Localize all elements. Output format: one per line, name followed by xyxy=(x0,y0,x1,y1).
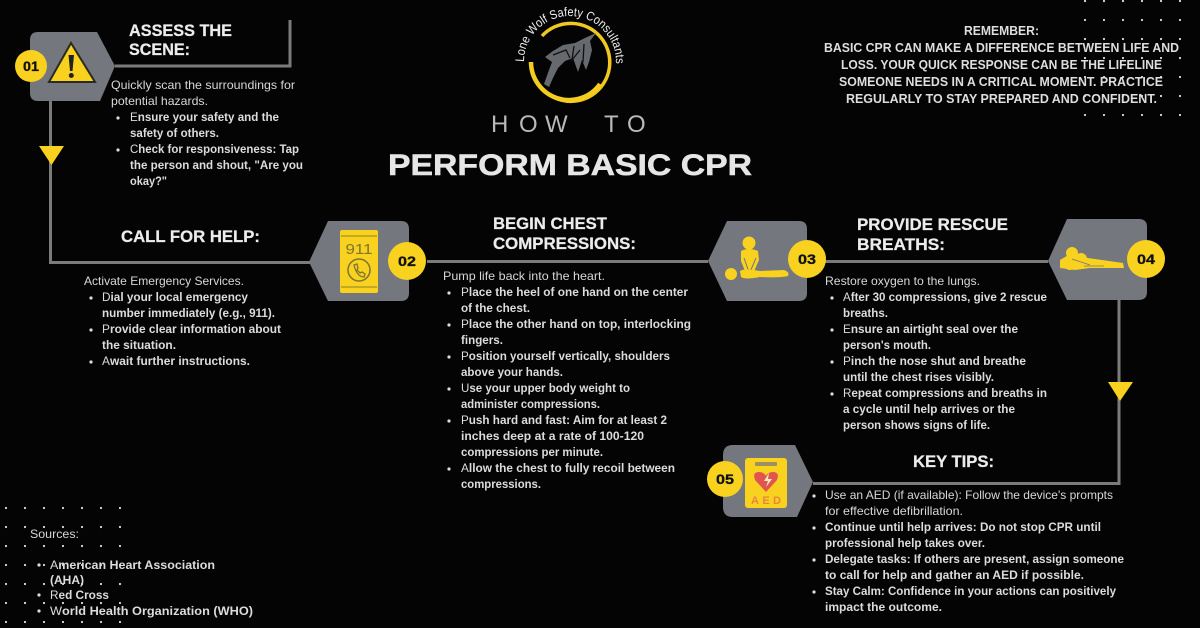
heading: assess the scene xyxy=(129,22,232,59)
text: chest compression steps: of the chest. xyxy=(461,301,530,315)
text: assess the scene steps: okay?" xyxy=(130,174,167,188)
arrow: step 4 to step 5 xyxy=(1108,382,1133,401)
step 1 badge: warning icon xyxy=(15,32,115,101)
text: key tips list: Continue until help arrives: Do not stop CPR until xyxy=(825,520,1101,534)
heading: provide rescue breaths xyxy=(857,216,1008,254)
text: chest compression steps: Allow the chest to fully recoil between xyxy=(461,461,675,475)
text: rescue breath steps: until the chest rises visibly. xyxy=(843,370,994,384)
text: chest compression steps: compressions per minute. xyxy=(461,445,603,459)
text: key tips list: Use an AED (if available): Follow the device's prompts xyxy=(825,488,1113,502)
text: assess the scene steps: safety of others. xyxy=(130,126,219,140)
callout: remember: SOMEONE NEEDS IN A CRITICAL MOMENT. PRACTICE xyxy=(839,75,1163,89)
text: chest compression steps: fingers. xyxy=(461,333,503,347)
text: assess the scene steps: potential hazards. xyxy=(111,94,208,108)
text: rescue breath steps xyxy=(825,274,1047,432)
step 5 badge: AED icon: 05 xyxy=(716,471,734,487)
text: key tips list: impact the outcome. xyxy=(825,600,942,614)
text: key tips list: Stay Calm: Confidence in your actions can positively xyxy=(825,584,1116,598)
text: sources: Red Cross xyxy=(50,588,109,602)
text: chest compression steps: Use your upper body weight to xyxy=(461,381,630,395)
text: sources: Sources: xyxy=(30,527,79,541)
text: chest compression steps: inches deep at a rate of 100-120 xyxy=(461,429,644,443)
text: key tips list: professional help takes over. xyxy=(825,536,985,550)
step 2 badge: 911 phone icon: 911 xyxy=(346,241,372,258)
step 4 badge: rescue breath icon: 04 xyxy=(1137,251,1155,267)
text: chest compression steps: Place the other hand on top, interlocking xyxy=(461,317,691,331)
text: chest compression steps: Place the heel of one hand on the center xyxy=(461,285,688,299)
text: rescue breath steps: Repeat compressions and breaths in xyxy=(843,386,1047,400)
text: chest compression steps: compressions. xyxy=(461,477,541,491)
text: assess the scene steps: Check for responsiveness: Tap xyxy=(130,142,299,156)
text: call for help steps: the situation. xyxy=(102,338,176,352)
step 3 badge: CPR icon: 03 xyxy=(798,251,816,267)
text: chest compression steps: Push hard and fast: Aim for at least 2 xyxy=(461,413,667,427)
text: key tips list: for effective defibrillation. xyxy=(825,504,963,518)
text: sources: World Health Organization (WHO) xyxy=(50,604,253,618)
callout: remember: LOSS. YOUR QUICK RESPONSE CAN BE THE LIFELINE xyxy=(841,58,1162,72)
arrow: step 1 to step 2 xyxy=(39,146,64,165)
heading: key tips: KEY TIPS: xyxy=(913,453,994,471)
logo: Lone Wolf Safety Consultants: Lone Wolf Safety Consultants xyxy=(515,7,624,64)
text: sources: (AHA) xyxy=(50,573,84,587)
text: rescue breath steps: a cycle until help arrives or the xyxy=(843,402,1015,416)
text: rescue breath steps: Restore oxygen to the lungs. xyxy=(825,274,980,288)
step 4 badge: rescue breath icon xyxy=(1048,219,1165,300)
heading: provide rescue breaths: PROVIDE RESCUE xyxy=(857,216,1008,234)
text: assess the scene steps: the person and shout, "Are you xyxy=(130,158,303,172)
text: rescue breath steps: Pinch the nose shut and breathe xyxy=(843,354,1026,368)
text: rescue breath steps: breaths. xyxy=(843,306,888,320)
text: rescue breath steps: After 30 compressions, give 2 rescue xyxy=(843,290,1047,304)
text: rescue breath steps: person's mouth. xyxy=(843,338,931,352)
heading: begin chest compressions: COMPRESSIONS: xyxy=(493,235,636,253)
text: call for help steps xyxy=(84,274,281,368)
heading: begin chest compressions: BEGIN CHEST xyxy=(493,215,607,233)
text: assess the scene steps: Ensure your safety and the xyxy=(130,110,279,124)
callout: remember xyxy=(824,24,1179,106)
text: rescue breath steps: Ensure an airtight seal over the xyxy=(843,322,1018,336)
text: key tips list: Delegate tasks: If others are present, assign someone xyxy=(825,552,1124,566)
heading: assess the scene: ASSESS THE xyxy=(129,22,232,40)
text: call for help steps: number immediately (e.g., 911). xyxy=(102,306,275,320)
text: chest compression steps: Position yourself vertically, shoulders xyxy=(461,349,670,363)
title: HOWTO xyxy=(491,111,646,138)
text: sources: American Heart Association xyxy=(50,558,215,572)
title xyxy=(388,111,752,182)
heading: call for help: CALL FOR HELP: xyxy=(121,228,260,246)
text: key tips list: to call for help and gather an AED if possible. xyxy=(825,568,1084,582)
text: chest compression steps: Pump life back into the heart. xyxy=(443,269,605,283)
callout: remember: REMEMBER: xyxy=(964,24,1039,38)
text: key tips list xyxy=(812,488,1124,614)
step 2 badge: 911 phone icon xyxy=(309,221,426,301)
heading: begin chest compressions xyxy=(493,215,636,253)
step 1 badge: warning icon: 01 xyxy=(23,58,39,74)
text: sources xyxy=(30,527,253,618)
heading: assess the scene: SCENE: xyxy=(129,41,190,59)
step 5 badge: AED icon xyxy=(707,445,813,517)
logo: Lone Wolf Safety Consultants xyxy=(515,7,624,104)
text: call for help steps: Dial your local emergency xyxy=(102,290,248,304)
text: call for help steps: Activate Emergency Services. xyxy=(84,274,244,288)
text: chest compression steps xyxy=(443,269,691,491)
text: chest compression steps: administer compressions. xyxy=(461,397,600,411)
step 3 badge: CPR icon xyxy=(708,221,826,301)
callout: remember: REGULARLY TO STAY PREPARED AND CONFIDENT. xyxy=(846,92,1157,106)
heading: provide rescue breaths: BREATHS: xyxy=(857,236,945,254)
step 5 badge: AED icon: AED xyxy=(751,495,781,507)
step 2 badge: 911 phone icon: 02 xyxy=(398,253,416,269)
text: assess the scene steps: Quickly scan the surroundings for xyxy=(111,78,295,92)
title: PERFORM BASIC CPR xyxy=(388,149,752,182)
text: rescue breath steps: person shows signs of life. xyxy=(843,418,990,432)
text: chest compression steps: above your hands. xyxy=(461,365,563,379)
text: call for help steps: Provide clear information about xyxy=(102,322,281,336)
callout: remember: BASIC CPR CAN MAKE A DIFFERENCE BETWEEN LIFE AND xyxy=(824,41,1179,55)
text: call for help steps: Await further instructions. xyxy=(102,354,250,368)
text: assess the scene steps xyxy=(111,78,303,188)
